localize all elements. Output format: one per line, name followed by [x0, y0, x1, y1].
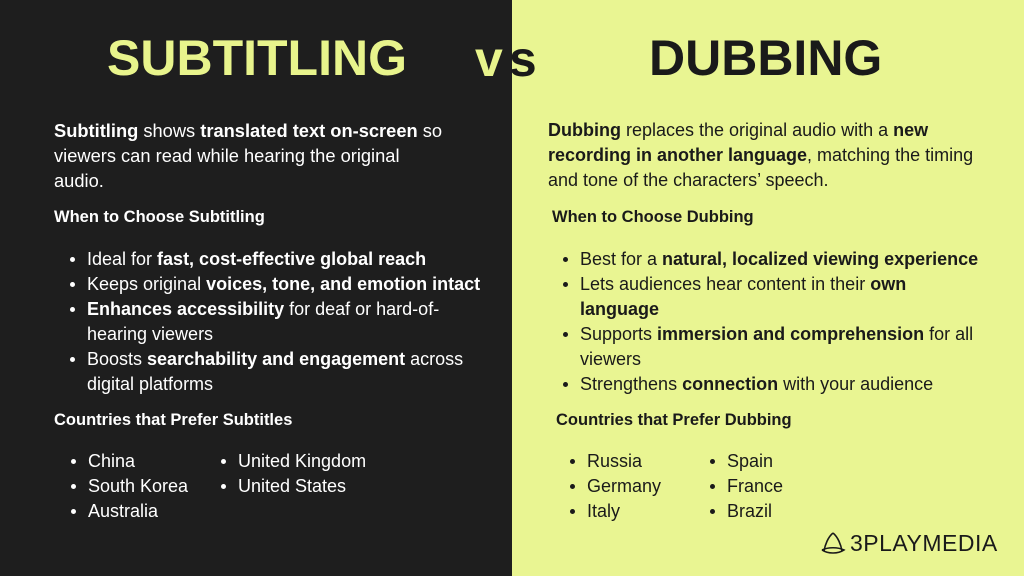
- list: dubbing countries col1: Russia: [587, 451, 642, 471]
- list: subtitling benefits: Keeps original voices, tone, and emotion intact: [87, 274, 480, 294]
- title: subtitling: SUBTITLING: [107, 30, 407, 86]
- list: dubbing benefits: Strengthens connection with your audience: [580, 374, 933, 394]
- list: subtitle countries col1: [71, 451, 188, 521]
- list: dubbing benefits: [563, 249, 978, 394]
- list: subtitle countries col1: Australia: [88, 501, 158, 521]
- title: dubbing: DUBBING: [649, 30, 882, 86]
- list: dubbing countries col1: [570, 451, 661, 521]
- heading: when to choose dubbing: When to Choose Dubbing: [552, 208, 754, 226]
- heading: countries subtitles: Countries that Prefer Subtitles: [54, 411, 292, 429]
- icon: logo mark: [822, 532, 846, 554]
- panel: dubbing: [512, 0, 1024, 576]
- list: subtitling benefits: [70, 249, 480, 394]
- list: dubbing benefits: Supports immersion and comprehension for all viewers: [580, 324, 973, 369]
- title: vs: vs: [475, 31, 543, 87]
- list: subtitle countries col1: South Korea: [88, 476, 188, 496]
- list: dubbing countries col1: Italy: [587, 501, 620, 521]
- list: subtitling benefits: Boosts searchability and engagement across digital platforms: [87, 349, 463, 394]
- text: subtitling definition: Subtitling shows translated text on-screen so viewers can read while hearing the original audio.: [54, 120, 442, 191]
- list: subtitle countries col2: United States: [238, 476, 346, 496]
- list: dubbing benefits: Lets audiences hear content in their own language: [580, 274, 906, 319]
- list: subtitle countries col2: [221, 451, 366, 496]
- list: subtitling benefits: Enhances accessibility for deaf or hard-of-hearing viewers: [87, 299, 439, 344]
- list: dubbing countries col2: France: [727, 476, 783, 496]
- heading: when to choose subtitling: When to Choose Subtitling: [54, 208, 265, 226]
- list: dubbing countries col2: Brazil: [727, 501, 772, 521]
- logo: 3playmedia: [822, 530, 998, 556]
- panel: subtitling: [0, 0, 512, 576]
- list: dubbing countries col1: Germany: [587, 476, 661, 496]
- list: subtitling benefits: Ideal for fast, cost-effective global reach: [87, 249, 426, 269]
- list: dubbing countries col2: Spain: [727, 451, 773, 471]
- heading: countries dubbing: Countries that Prefer Dubbing: [556, 411, 792, 429]
- list: subtitle countries col1: China: [88, 451, 135, 471]
- list: subtitle countries col2: United Kingdom: [238, 451, 366, 471]
- text: logo: 3PLAYMEDIA: [850, 530, 998, 556]
- list: dubbing benefits: Best for a natural, localized viewing experience: [580, 249, 978, 269]
- list: dubbing countries col2: [710, 451, 783, 521]
- text: dubbing definition: Dubbing replaces the original audio with a new recording in another language, matching the timing and tone of the characters’ speech.: [548, 120, 973, 190]
